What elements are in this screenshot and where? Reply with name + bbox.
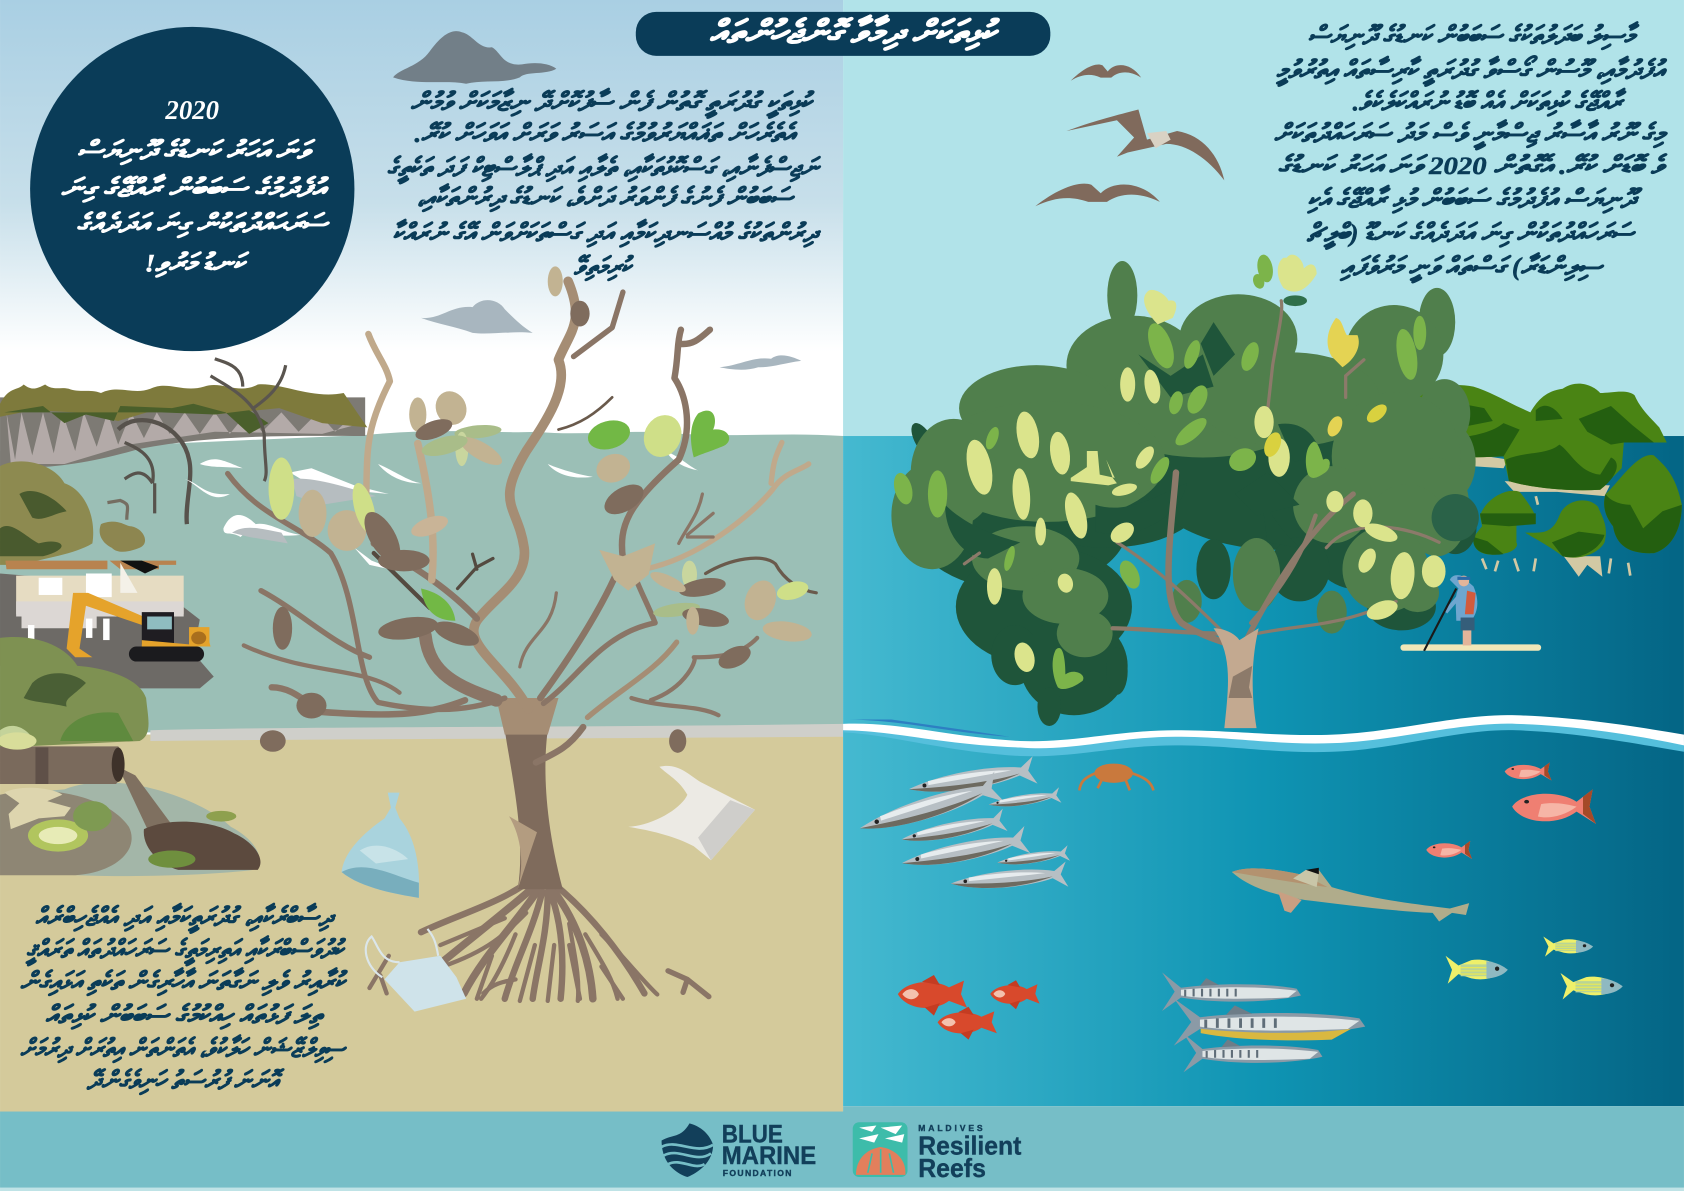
frigate bird large [1066, 110, 1224, 180]
roots [369, 875, 709, 1001]
branches [228, 281, 816, 762]
text block: climate impacts: ރާއްޖޭގެ ކުޅިތަކަށް އެއް ބޮޑު ނުރައްކަލެކެވެ. [1353, 88, 1627, 118]
callout circle: 2020 coral bleaching: ސަރަޙައްދުތަކުން ގިނަ އަދަދެއްގެ [77, 209, 331, 239]
leaves [962, 367, 1446, 674]
frigate bird lower [1035, 184, 1160, 206]
dark canopy [907, 395, 1477, 726]
grey cloud over mountain [393, 31, 556, 84]
barracuda group [1162, 972, 1365, 1072]
left sky [0, 0, 843, 451]
text block: wetland intro: ސަބަބުން ފެނުގެ ފެންވަރު ދަށްވެ، ކަނޑުގެ ދިރުންތަކާއި، [417, 183, 796, 213]
excavator [67, 593, 211, 662]
school of silver fish [854, 756, 1070, 891]
waves [185, 451, 698, 571]
callout circle: 2020 coral bleaching: 2020 [164, 95, 219, 126]
title banner [636, 12, 1050, 56]
distant cloud [720, 355, 801, 370]
text block: wetland intro: ކުރިމަތިވޭ [573, 252, 634, 282]
panel: left side threatened mangrove [0, 0, 843, 1113]
leaves [260, 266, 813, 753]
text block: wetland intro [387, 88, 822, 282]
text block: wetland intro: ނަޖިސްފެނާއި، ގަސްކޮޅުތަކާއި، ތެލާއި އަދި ޕްލާސްޓިކް ފަދަ ތަކެތީގެ [387, 153, 821, 185]
logo: Blue Marine Foundation: BLUE [722, 1122, 783, 1149]
yellow striped fish [1446, 936, 1623, 1000]
paddleboarder [1400, 575, 1541, 651]
logo: Maldives Resilient Reefs [853, 1122, 1022, 1183]
text block: pollution impacts [20, 903, 348, 1096]
plastic bag: blue [342, 793, 419, 898]
text block: climate impacts [1274, 21, 1668, 284]
callout circle: 2020 coral bleaching [30, 27, 354, 351]
text block: climate impacts: އުފެދުމާއި، މޫސުން ގޯސްވާ ގުދުރަތީ ކާރިސާތައް އިތުރުވުމީ [1276, 54, 1667, 87]
crab [1079, 764, 1153, 790]
text block: climate impacts: މާސިލު ބަދަލުތަކުގެ ސަބަބުން ކަނޑުގެ ދޫނިޔަސް [1308, 21, 1640, 51]
logo: Blue Marine Foundation [662, 1122, 816, 1178]
frigate bird top [1071, 64, 1141, 81]
damaged shoreline [0, 359, 367, 524]
wave surface [843, 715, 1684, 756]
waterline [150, 724, 843, 741]
small cloud [421, 300, 533, 334]
text block: wetland intro: ދިރުންތަކުގެ މުއްސަނދިކަމާއި އަދި ގަސްތަކަށްވަން އޭގެ ނުރައްކާ [393, 219, 822, 249]
plastic bag: white [628, 766, 755, 860]
text block: pollution impacts: ސިވިލްޒޭޝަން ހަލާކުވެ، އެތަންތަން އިތުރަށް ދިރުމަށް [20, 1034, 348, 1064]
text block: pollution impacts: އޮނަނަ ފުރުސަތު ހަނިވެގެންދޭ [86, 1066, 285, 1096]
background mangroves [1410, 384, 1682, 577]
dead mangrove tree [228, 266, 816, 1001]
ground pad [0, 573, 214, 688]
trunk [505, 730, 563, 889]
branches and trunk [964, 301, 1439, 644]
text block: pollution impacts: ކުރާއިރު ވެލި ނަގާތަނަ އާހާރިގެން ތަކެތި އަޅައިގެން [20, 967, 348, 997]
olive shrub [0, 461, 145, 565]
callout circle: 2020 coral bleaching: ވަނަ އަހަރު ކަނޑުގެ ދޫނިޔަސް [77, 136, 316, 166]
text block: wetland intro: އެތެރެހަށް ތަޣައްޔަރުވުމުގެ އަސަރު ވަރަށް އަވަހަށް ކުރޭ. [415, 119, 798, 148]
footer band [0, 1106, 1684, 1191]
text block: climate impacts: ސިލިންޑަރާ) ގަސްތައް ވަނީ މަރުވެފައި [1340, 252, 1605, 284]
callout circle: 2020 coral bleaching: ކަނޑު މަރުވި! [144, 249, 250, 279]
coastal building [5, 561, 184, 642]
panel: right side healthy mangrove [843, 0, 1684, 1106]
mid-green canopy [891, 261, 1476, 657]
text block: climate impacts: ވެ ބޮޑަށް ކުރޭ. އެގޮތުން 2020 ވަނަ އަހަރު ކަނޑުގެ [1278, 151, 1668, 180]
green shrub [0, 637, 149, 747]
left sea [0, 431, 843, 732]
sewage pipe and polluted outflow [0, 732, 260, 876]
pink snappers [1426, 762, 1596, 859]
red fish group [898, 975, 1040, 1040]
text block: pollution impacts: ކުދުވަސްބްރަކާއި އަތިރިމަތީގެ ސަރަހައްދުތައް ތަރައްޤީ [26, 935, 346, 967]
logo: Blue Marine Foundation: FOUNDATION [723, 1168, 792, 1178]
right water surface and underwater [843, 436, 1684, 1106]
right sky [843, 0, 1684, 436]
text block: pollution impacts: ދިސާބްރެކާއި، ގުދުރަތީކަމާއި އަދި އެއްޖެހިބްރެއް [35, 903, 337, 935]
callout circle: 2020 coral bleaching: އުފެދުމުގެ ސަބަބުން ރާއްޖޭގެ ގިނަ [61, 174, 329, 204]
sand seabed [0, 735, 843, 1113]
logo: Maldives Resilient Reefs: MALDIVES [918, 1123, 983, 1133]
logo: Maldives Resilient Reefs: Reefs [918, 1155, 986, 1183]
healthy mangrove tree [891, 253, 1479, 728]
icon: blue marine wave badge [662, 1123, 713, 1177]
text block: climate impacts: ސަރަހައްދުތަކުން ގިނަ އަދަދެއްގެ ކަނޑޫ (ބްލީޗް [1306, 219, 1637, 251]
discarded face mask [366, 929, 466, 1012]
icon: coral reef tile [853, 1122, 908, 1177]
title banner: ކުޅިތަކަށް ދިމާވާ ގޮންޖެހުންތައް [710, 14, 1001, 51]
text block: climate impacts: މިގެ ނޫރު އާސާރު ޖިސްމާނީ ވެސް މަދު ސަރަހައްދުތަކަށް [1274, 119, 1668, 151]
text block: climate impacts: ދޫނިޔަސް އުފެދުމުގެ ސަބަބުން މުޅި ރާއްޖޭގެ އެކި [1307, 184, 1643, 214]
logo: Blue Marine Foundation: MARINE [722, 1143, 816, 1170]
text block: wetland intro: ކުޅިތަކީ ގުދުރަތީ ގޮތުން ފެން ސާފުކޮށްދޭ ނިޒާމަކަށް ވުމުން [411, 88, 815, 120]
reef shark [1232, 868, 1469, 921]
text block: pollution impacts: ތިލަ ފަޅުތައް ހިއްކުމުގެ ސަބަބުން ކުޅިތައް [46, 1000, 325, 1030]
logo: Maldives Resilient Reefs: Resilient [918, 1132, 1022, 1160]
